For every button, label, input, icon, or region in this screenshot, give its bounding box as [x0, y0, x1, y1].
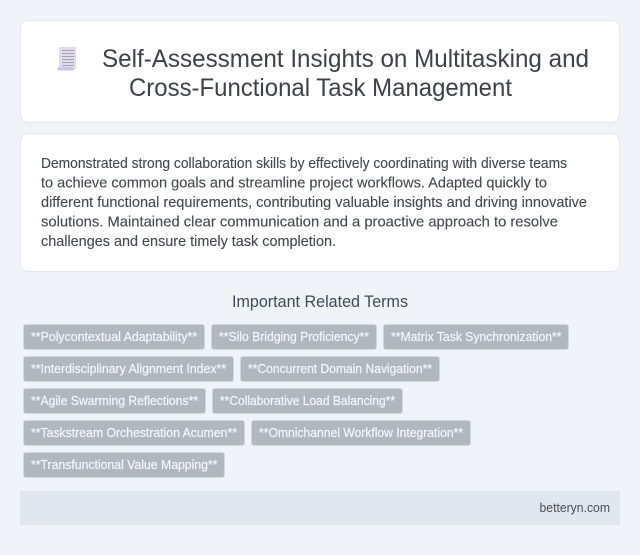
- footer bar: [20, 491, 620, 525]
- tag: [24, 324, 204, 350]
- tag: [24, 356, 234, 382]
- summary text: Demonstrated strong collaboration skills by effectively coordinating with diverse teams: [41, 156, 567, 172]
- title: Self-Assessment Insights on Multitasking and: [102, 45, 589, 73]
- summary text: different functional requirements, contributing valuable insights and driving innovative: [41, 195, 587, 211]
- tag: [240, 356, 440, 382]
- tag: [252, 420, 470, 446]
- tag: **Matrix Task Synchronization**: [391, 330, 562, 344]
- tag: [24, 388, 206, 414]
- tag: **Omnichannel Workflow Integration**: [259, 426, 463, 440]
- icon: document scroll: [58, 47, 76, 70]
- summary text: solutions. Maintained clear communication and a proactive approach to resolve: [41, 214, 558, 230]
- footer source text: betteryn.com: [540, 501, 610, 515]
- summary text: [41, 156, 587, 250]
- summary text: to achieve common goals and streamline project workflows. Adapted quickly to: [41, 176, 547, 192]
- tag: **Agile Swarming Reflections**: [31, 394, 198, 408]
- title: Cross-Functional Task Management: [129, 74, 512, 102]
- panel: header card: [20, 20, 620, 122]
- tag: **Collaborative Load Balancing**: [220, 394, 395, 408]
- tag: **Silo Bridging Proficiency**: [219, 330, 369, 344]
- title: [102, 45, 589, 102]
- tag: [384, 324, 568, 350]
- tag: **Polycontextual Adaptability**: [31, 330, 197, 344]
- tag: [24, 420, 244, 446]
- tag list: [24, 324, 568, 478]
- heading: important related terms: Important Related Terms: [232, 293, 408, 311]
- tag: [212, 388, 402, 414]
- tag: **Transfunctional Value Mapping**: [31, 458, 218, 472]
- tag: [212, 324, 376, 350]
- panel: summary paragraph card: [20, 134, 620, 272]
- tag: [24, 452, 224, 478]
- tag: **Interdisciplinary Alignment Index**: [31, 362, 226, 376]
- tag: **Taskstream Orchestration Acumen**: [31, 426, 237, 440]
- summary text: challenges and ensure timely task completion.: [41, 234, 336, 250]
- tag: **Concurrent Domain Navigation**: [248, 362, 432, 376]
